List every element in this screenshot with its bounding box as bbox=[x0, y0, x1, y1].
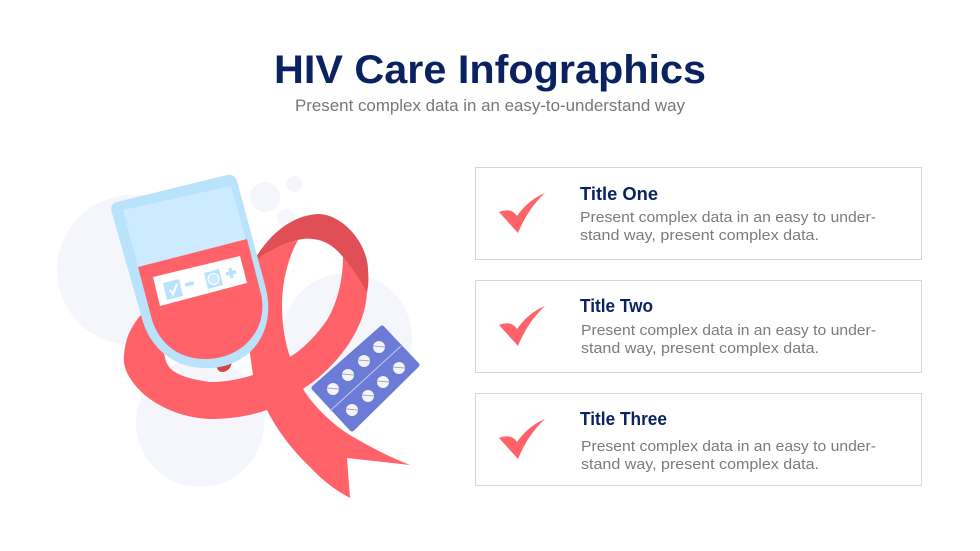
heading: Title Three bbox=[580, 409, 667, 429]
bag tube patch bbox=[164, 352, 253, 382]
blood bag bbox=[111, 175, 268, 368]
icon: check mark bbox=[499, 193, 545, 233]
icon: check mark bbox=[499, 419, 545, 459]
bag label bbox=[153, 256, 247, 306]
text block: Present complex data in an easy to under- bbox=[581, 322, 876, 339]
heading: Title Two bbox=[580, 296, 653, 316]
pill blister pack bbox=[314, 328, 417, 429]
text block: Present complex data in an easy to under- bbox=[581, 438, 876, 455]
text block: stand way, present complex data. bbox=[581, 456, 819, 473]
icon: check mark bbox=[499, 306, 545, 346]
panel: title two bbox=[476, 280, 922, 372]
panel: title three bbox=[476, 394, 922, 486]
background circles bbox=[57, 176, 412, 487]
text block: stand way, present complex data. bbox=[580, 227, 819, 244]
ribbon: back loop bbox=[250, 214, 368, 293]
panel: title one bbox=[476, 168, 922, 260]
text block: Present complex data in an easy to under- bbox=[580, 209, 876, 226]
heading: Title One bbox=[580, 184, 658, 204]
subtitle: Present complex data in an easy-to-understand way bbox=[295, 96, 685, 115]
illustration: HIV ribbon, blood bag and pills bbox=[57, 175, 417, 498]
title: HIV Care Infographics bbox=[274, 48, 706, 92]
text block: stand way, present complex data. bbox=[581, 340, 819, 357]
ribbon: front band bbox=[124, 240, 410, 498]
